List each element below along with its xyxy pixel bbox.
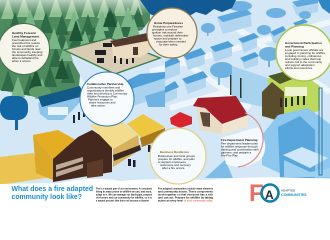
panel: forest land management: when it occurs. [12, 59, 31, 63]
text block: intro column 2 [157, 186, 213, 202]
blue houses [120, 0, 318, 107]
municipal green building [230, 66, 320, 125]
panel: forest land management: the community, keeping [12, 50, 43, 54]
panel: government participation: and Planning [285, 44, 304, 48]
panel: fire department planning: Pre-Fire Plan. [221, 154, 239, 158]
cul-de-sac blue wedge [205, 160, 233, 178]
panel: collaborative partnership: Partners engage to [88, 98, 113, 102]
panel: forest land management: able to withstand fire [12, 56, 39, 60]
panel: collaborative partnership: risks and develop a Community [87, 92, 128, 96]
title: community look like? [12, 194, 82, 201]
white footer band [0, 177, 330, 215]
panel: fire department planning: partners, and prepare a [221, 150, 252, 154]
left blue building with dark roof [0, 86, 91, 130]
text block: intro column 2: and can act. Prepare for wildfire by taking [158, 196, 213, 200]
icon: fire adapted communities logo: COMMUNITIES [281, 193, 307, 197]
panel: cleared parcel with community building [64, 33, 160, 74]
panel: government participation: reduce risk to the community [285, 60, 323, 64]
text block: intro column 2: action at every level [158, 198, 183, 202]
text block: intro column 1: adapt to it. We can manage our landscape, prepare [96, 192, 152, 196]
panel: collaborative partnership: Wildfire Protection Plan. [87, 94, 118, 98]
panel: government participation [276, 25, 330, 81]
panel: government participation: and support adaptation [285, 63, 315, 67]
text block: intro column 2: of your community today. [184, 198, 213, 202]
text block: intro column 1: a natural process that does not become a disaster [96, 198, 150, 202]
panel: fire department planning: Fire Department Planning [221, 138, 258, 142]
panel: fire department planning [221, 113, 265, 167]
panel: government participation: Local government officials are [285, 48, 324, 52]
panel: home preparedness [147, 8, 197, 58]
panel: collaborative partnership: organizations identify wildfire [87, 88, 124, 92]
panel: business resilience: to support employees, [158, 160, 187, 164]
panel: collaborative partnership: take action. [91, 104, 106, 108]
panel: government participation: including zoning, ordinances [285, 54, 322, 58]
panel: forest land management: prescribed fire reduce [12, 41, 40, 45]
panel: home preparedness: homes, maintain defensible [153, 34, 189, 38]
panel: business resilience [150, 128, 206, 184]
panel: business resilience: after a fire occurs. [162, 166, 185, 170]
icon: fire adapted communities logo: A [265, 188, 274, 202]
icon: fire adapted communities logo: ADAPTED [281, 188, 296, 192]
title [12, 186, 93, 201]
panel: fire department planning: Fire department leaders plan [221, 142, 258, 146]
icon: red fire station [170, 96, 248, 137]
panel: government participation: engaged in planning for wildfire, [285, 51, 326, 55]
panel: forest land management: Healthy Forests/ [12, 31, 36, 35]
panel: home preparedness: Residents use Firewise [153, 24, 183, 28]
text block: intro column 1: living in areas prone to wildfire we can, and must, [96, 190, 152, 194]
panel: government participation: efforts and resources. [285, 66, 313, 70]
yellow commercial buildings [0, 114, 165, 185]
panel: home preparedness: principles to reduce [152, 28, 177, 32]
icon: fire adapted communities logo: F [249, 180, 264, 207]
forest [0, 0, 150, 99]
icon: fire adapted communities logo [249, 180, 307, 207]
panel: fire department planning: training and coordination with [221, 148, 259, 152]
panel: business resilience: Business Resilience [160, 150, 189, 154]
panel: collaborative partnership: share resources and [89, 100, 116, 104]
text block: intro column 1: our homes and our community for wildfire, so it is [96, 196, 152, 200]
panel: forest land management [0, 24, 50, 74]
text block: intro column 2: Fire adapted communities include many elements [158, 186, 213, 190]
panel: government participation: Government Participation [285, 41, 322, 45]
streets [52, 20, 330, 112]
blue trees [201, 1, 311, 85]
text block: intro column 1: Fire is a natural part of our environment. As residents [96, 186, 152, 190]
panel: collaborative partnership [80, 72, 134, 126]
panel: home preparedness: evacuate when needed [156, 40, 186, 44]
text block: intro column 2: work together so that everyone has a role [157, 192, 213, 196]
panel: forest land management: Land Management [12, 34, 39, 38]
panel: forest land management: Fuel treatment and [12, 38, 37, 42]
panel: fire department planning: for wildfire response through [221, 144, 258, 148]
large blue building [262, 88, 330, 178]
panel: home preparedness: for their safety. [159, 42, 178, 46]
panel: home preparedness: ignition risk around their [152, 30, 183, 34]
panel: collaborative partnership: Collaborative Partnership [87, 82, 124, 86]
panel: forest land management: the risk of wildfire on [12, 44, 39, 48]
panel: collaborative partnership: Community members and [87, 86, 120, 90]
dark blue treeline [140, 0, 330, 20]
title: What does a fire adapted [12, 186, 93, 193]
panel: home preparedness: space and prepare to [154, 36, 182, 40]
panel: business resilience: Businesses and local groups [158, 154, 195, 158]
panel: business resilience: prepare for wildfire, and plan [158, 157, 195, 161]
panel: government participation: and building codes that help [285, 57, 321, 61]
panel: home preparedness: Home Preparedness [154, 21, 183, 25]
text block: intro column 1 [96, 186, 152, 202]
panel: business resilience: customers and recovery [160, 163, 191, 167]
panel: forest land management: forests and lands near [12, 47, 41, 51]
panel: forest land management: landscapes healthy and [12, 53, 43, 57]
text block: intro column 2: and community assets. These components [158, 190, 213, 194]
